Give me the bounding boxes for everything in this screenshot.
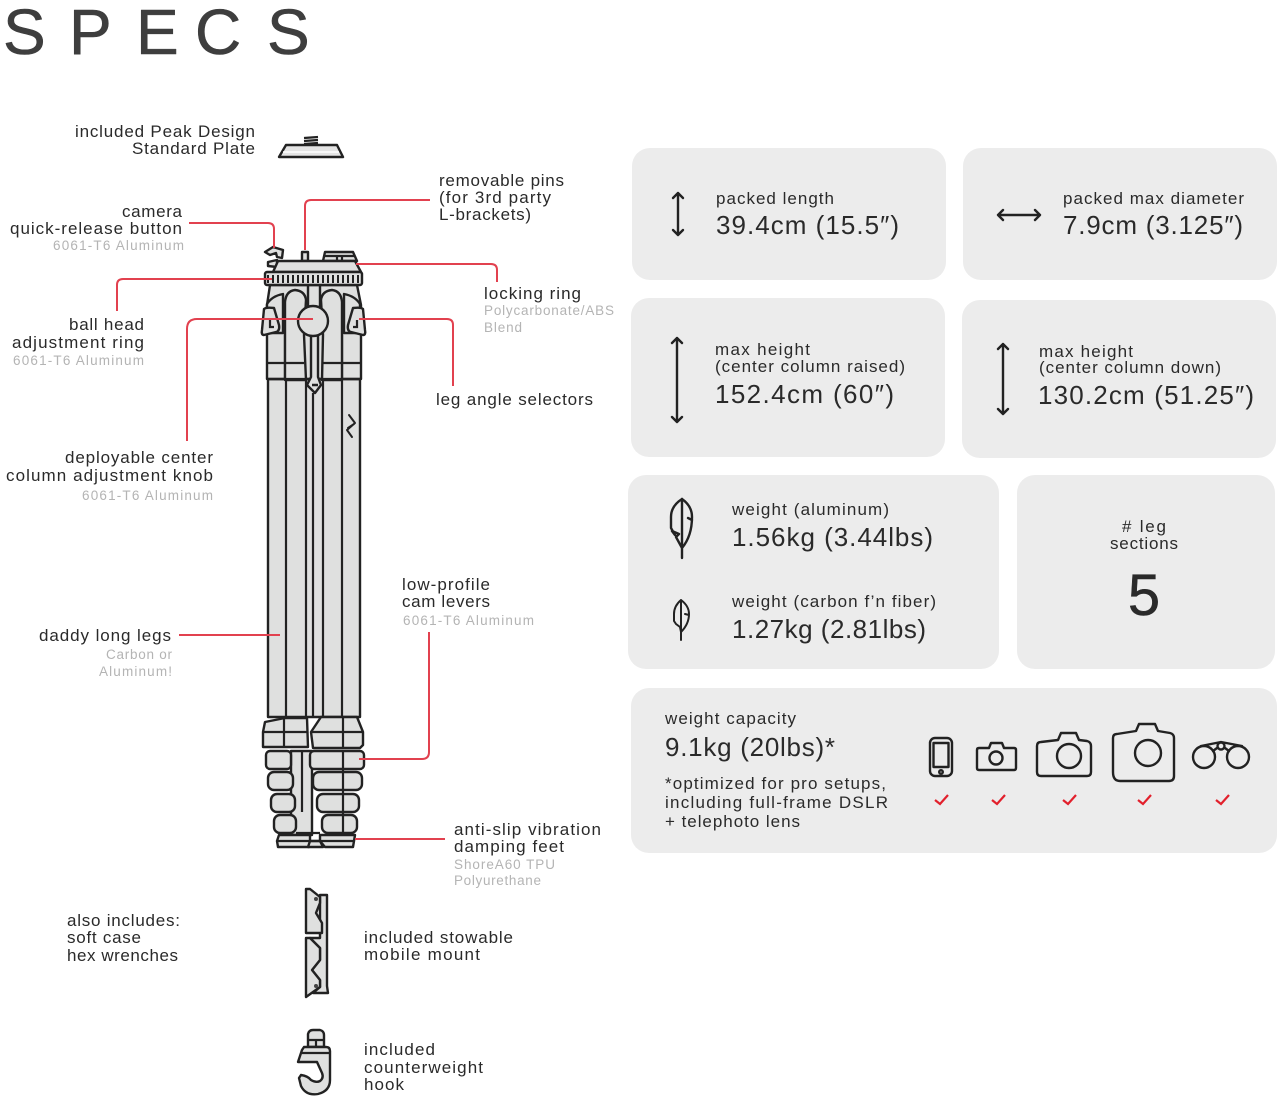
label: anti-slip feet: Polyurethane (454, 873, 541, 888)
label: locking ring (484, 284, 614, 335)
icon: small feather (674, 600, 689, 640)
tripod diagram (262, 247, 365, 847)
label: ball head adjustment ring: ball head (69, 315, 144, 334)
panel: leg sections: 5 (1128, 563, 1160, 628)
panel: packed max diameter: 7.9cm (3.125″) (1063, 210, 1243, 240)
panel: weight (628, 475, 999, 669)
panel: packed length: packed length (716, 189, 834, 208)
icon: phone (930, 738, 952, 776)
label: low-profile cam levers: 6061-T6 Aluminum (403, 613, 534, 628)
label: removable pins: removable pins (439, 171, 564, 190)
label: standard plate: included Peak Design (75, 122, 255, 141)
checkmarks (935, 795, 1229, 804)
label: anti-slip feet: anti-slip vibration (454, 820, 601, 839)
label: mobile mount: included stowable (364, 928, 513, 947)
panel: packed max diameter (963, 148, 1277, 280)
panel: max height raised: (center column raised) (715, 357, 905, 376)
label: leg angle selectors: leg angle selectors (436, 390, 593, 409)
label: locking ring: Blend (484, 320, 522, 335)
label: daddy long legs: Aluminum! (99, 664, 172, 679)
label: also includes: hex wrenches (67, 946, 178, 965)
panel: weight capacity (631, 688, 1277, 853)
label: camera quick-release button: camera (122, 202, 183, 221)
label: low-profile cam levers: cam levers (402, 592, 490, 611)
panel: max height raised (631, 298, 945, 457)
locking ring and top plate (265, 247, 362, 285)
label: standard plate (75, 122, 255, 158)
icon: dslr camera (1113, 724, 1174, 781)
icon: tall arrow (998, 344, 1008, 414)
label: also includes: soft case (67, 928, 141, 947)
label: camera quick-release button (10, 202, 184, 253)
panel: packed length (632, 148, 946, 280)
panel: max height down: 130.2cm (51.25″) (1038, 380, 1254, 410)
label: low-profile cam levers: low-profile (402, 575, 490, 594)
label: removable pins: (for 3rd party (439, 188, 552, 207)
leg collars and cam levers (263, 717, 364, 847)
label: camera quick-release button: quick-release button (10, 219, 182, 238)
label: standard plate: Standard Plate (132, 139, 255, 158)
label: anti-slip feet: ShoreA60 TPU (454, 857, 555, 872)
label: removable pins (439, 171, 564, 224)
label: ball head adjustment ring: 6061-T6 Aluminum (13, 353, 144, 368)
label: mobile mount: mobile mount (364, 945, 480, 964)
label: center column knob (6, 448, 213, 503)
label: locking ring: Polycarbonate/ABS (484, 303, 614, 318)
label: daddy long legs: Carbon or (106, 647, 172, 662)
label: anti-slip feet (454, 820, 601, 888)
panel: weight capacity: weight capacity (664, 709, 796, 728)
label: counterweight hook: counterweight (364, 1058, 483, 1077)
panel: weight capacity: + telephoto lens (665, 812, 800, 831)
panel: max height raised: 152.4cm (60″) (715, 379, 894, 409)
panel: max height down (962, 300, 1276, 458)
panel: packed max diameter: packed max diameter (1063, 189, 1244, 208)
panel: weight capacity: including full-frame DSLR (665, 793, 888, 812)
label: counterweight hook: included (364, 1040, 435, 1059)
label: center column knob: 6061-T6 Aluminum (82, 488, 213, 503)
panel: weight: 1.27kg (2.81lbs) (732, 614, 926, 644)
label: anti-slip feet: damping feet (454, 837, 564, 856)
panel: max height raised: max height (715, 340, 810, 359)
label: center column knob: deployable center (65, 448, 213, 467)
leader lines (117, 200, 497, 839)
panel: weight capacity: *optimized for pro setups, (665, 774, 886, 793)
icon: mobile mount (306, 889, 328, 997)
icon: large feather (671, 499, 692, 558)
label: camera quick-release button: 6061-T6 Aluminum (53, 238, 184, 253)
panel: leg sections (1017, 475, 1275, 669)
panel: weight capacity: 9.1kg (20lbs)* (665, 732, 835, 762)
panel: weight: weight (aluminum) (731, 500, 889, 519)
label: mobile mount (364, 928, 513, 964)
icon: compact camera (977, 743, 1016, 770)
label: counterweight hook (364, 1040, 483, 1094)
panel: leg sections: sections (1110, 534, 1178, 553)
label: also includes (67, 911, 180, 965)
panel: weight: weight (carbon f’n fiber) (731, 592, 936, 611)
label: low-profile cam levers (402, 575, 534, 628)
label: ball head adjustment ring (12, 315, 144, 368)
label: ball head adjustment ring: adjustment ring (12, 333, 144, 352)
panel: weight: 1.56kg (3.44lbs) (732, 522, 933, 552)
tripod head and shoulders (262, 285, 365, 393)
icon: counterweight hook (298, 1030, 330, 1094)
tripod legs (268, 379, 360, 717)
icon: vertical arrow (673, 193, 683, 235)
icon: binoculars (1193, 742, 1249, 768)
panel: max height down: max height (1039, 342, 1133, 361)
icon: tall arrow (672, 338, 682, 422)
icon: mirrorless camera (1037, 733, 1091, 776)
label: locking ring: locking ring (484, 284, 581, 303)
label: removable pins: L-brackets) (439, 205, 531, 224)
label: center column knob: column adjustment knob (6, 466, 213, 485)
label: daddy long legs (39, 626, 172, 679)
label: also includes: also includes: (67, 911, 180, 930)
panel: packed length: 39.4cm (15.5″) (716, 210, 899, 240)
icon: standard plate (279, 137, 343, 157)
panel: leg sections: # leg (1122, 517, 1166, 536)
label: daddy long legs: daddy long legs (39, 626, 171, 645)
panel: max height down: (center column down) (1039, 358, 1221, 377)
icon: horizontal arrow (998, 210, 1040, 220)
label: counterweight hook: hook (364, 1075, 404, 1094)
